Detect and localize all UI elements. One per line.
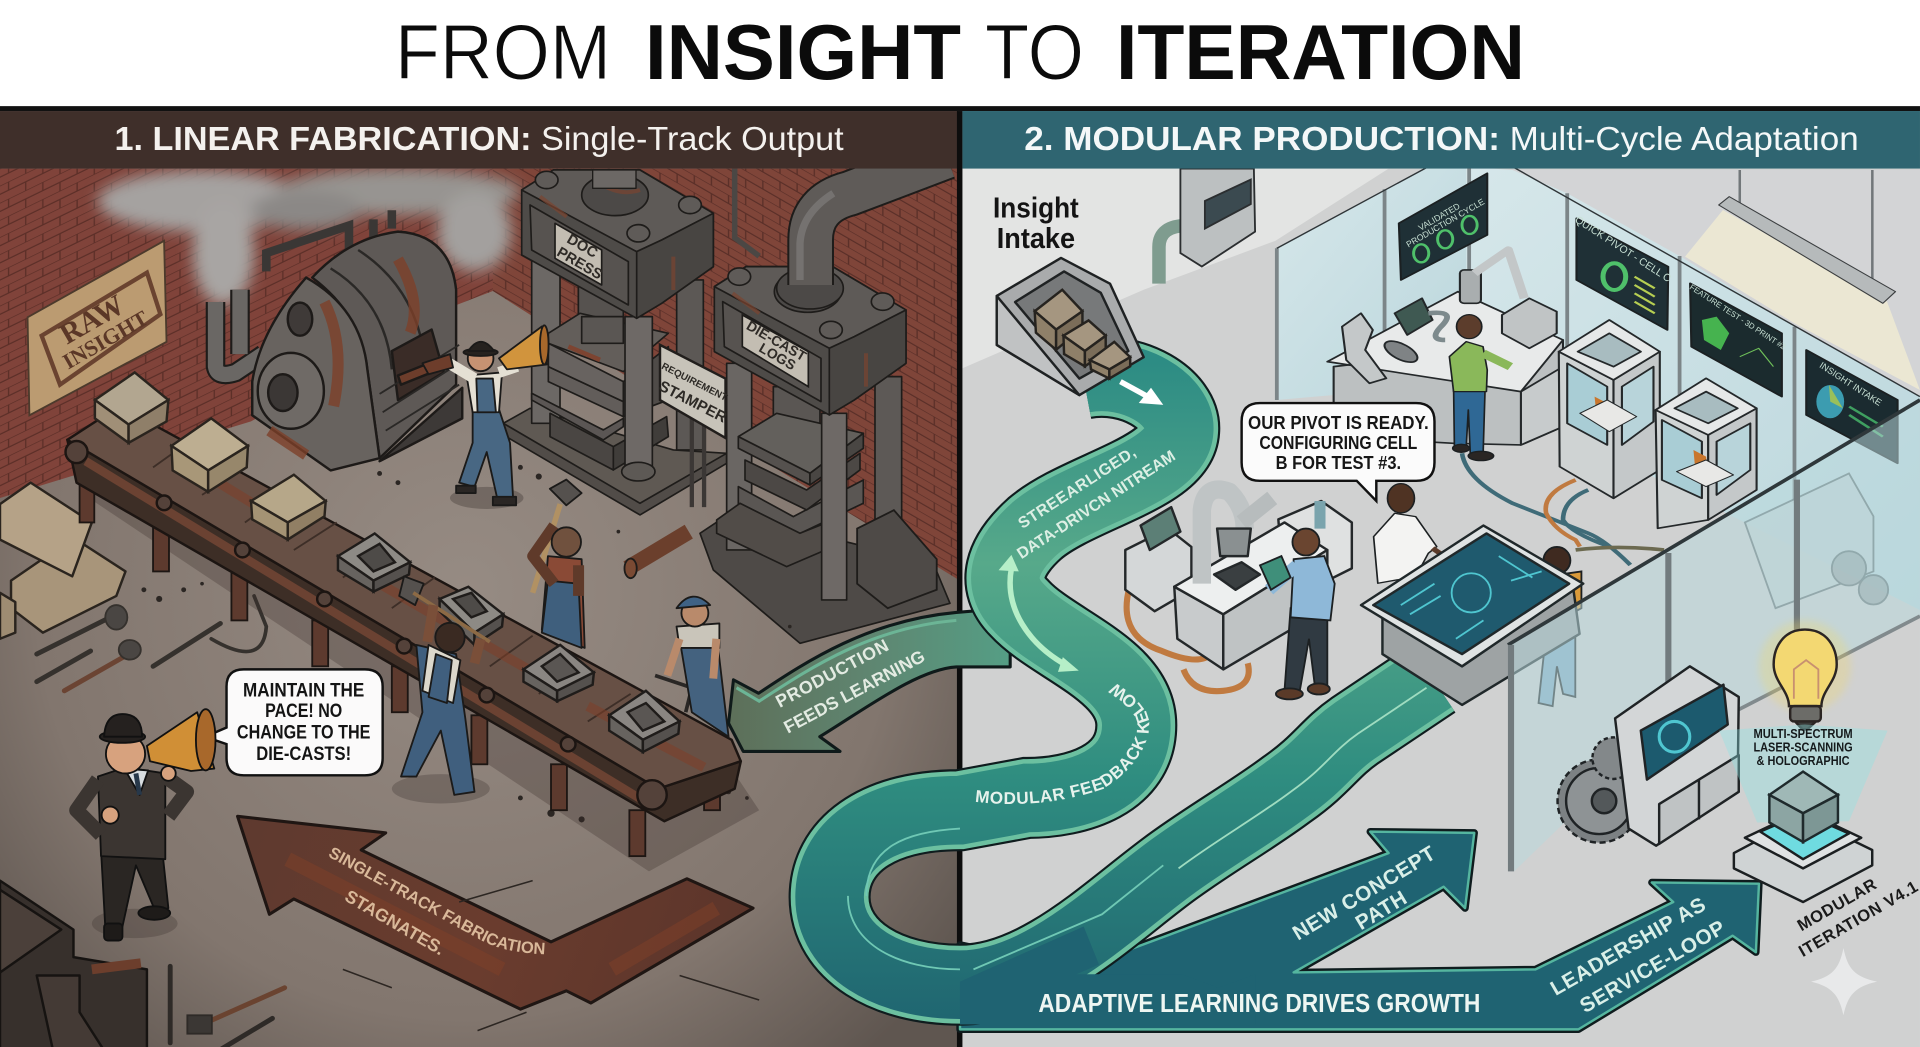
hologram label [1753,726,1853,768]
cubicle frames [1277,167,1920,503]
conveyor shadow [80,483,759,871]
gears [1558,737,1641,843]
conveyor belt [66,406,741,821]
speech bubble: maintain the pace: DIE-CASTS! [256,744,351,765]
label: modular iteration v4.1: MODULAR [1794,874,1880,935]
monitor: quick pivot cell c [1576,218,1668,330]
glass cubicle: side wall [1277,167,1468,400]
hologram label: LASER-SCANNING [1753,739,1853,754]
raw blocks on belt [95,372,326,540]
road label: streamlined data-driven stream: STREEARLIGED, [1015,444,1140,532]
heading: insight intake [994,196,1078,248]
scattered hand tools [170,966,285,1047]
worker pushing cart [655,597,729,737]
sign: requirement stamper: REQUIREMENT [659,361,729,404]
engineer in white shirt [1374,484,1447,583]
die-cast label plate: DIE-CAST [744,317,809,364]
sign: requirement stamper: STAMPER [656,378,729,426]
chute [997,258,1144,395]
speech bubble: maintain the pace: MAINTAIN THE [243,680,364,701]
monitor captions: VALIDATED [1417,201,1462,233]
arrow: single-track fabrication stagnates: SINGLE-TRACK FABRICATION [329,848,545,954]
worker in orange shirt [1514,547,1581,706]
overhead pipe [777,157,947,309]
sign: raw insight [28,241,167,415]
rear machine with gears [1745,473,1888,608]
clean floor [960,169,1920,1047]
wall kiosk and pipe [1159,169,1255,284]
back wall [960,169,1389,369]
title: INSIGHT [645,8,961,96]
raw cubes in the chute [1035,290,1130,379]
press: doc press: DOC [564,231,600,262]
3D printer 1 [1559,320,1660,498]
panel divider [957,111,962,1047]
vise and workbench [0,881,147,1047]
road label: streamlined data-driven stream: DATA-DRIVCN NITREAM [1014,448,1179,563]
ceiling zone [1513,170,1920,397]
road arrows [999,382,1163,672]
light cone [1685,210,1920,390]
arrow: single-track fabrication stagnates [236,814,760,1032]
speech bubble: our pivot is ready [1242,403,1434,501]
heading: insight intake: Intake [997,223,1075,255]
heading: insight intake: Insight [993,193,1079,225]
manager in suit with megaphone [77,709,216,941]
debris [141,465,792,822]
panel: modular production [960,167,1920,1047]
die-cast label plate: LOGS [756,339,799,373]
worker with sledgehammer [533,480,585,648]
furnace machine [252,232,462,470]
die-cast label plate [742,315,809,387]
speech bubble: maintain the pace [205,669,383,775]
monitor captions [1404,196,1884,408]
speech bubble: our pivot is ready: OUR PIVOT IS READY. [1248,412,1429,433]
arrow: production feeds learning [729,584,1010,751]
front glass partition [1508,400,1920,871]
conveyor legs [80,477,720,856]
panel heading: linear fabrication: 1. LINEAR FABRICATION: Single-Track Output [114,121,844,158]
sign: raw insight: INSIGHT [58,305,153,374]
engineer with tablet [1260,529,1335,699]
factory floor [0,169,960,1047]
hologram label: & HOLOGRAPHIC [1757,753,1850,768]
scanned cube [1769,772,1838,842]
press: die-cast logs [700,267,950,643]
glass cubicle: back wall [1466,167,1920,610]
wall conduit [735,169,759,256]
interactive table [1361,526,1583,705]
right brick wall [493,169,960,581]
arrow label: leadership as service-loop: LEADERSHIP AS [1547,893,1710,1000]
worker with megaphone [422,325,549,509]
floor tools [37,596,266,691]
sign: requirement stamper [656,345,729,507]
worker striking mould [392,576,490,803]
panel heading: linear fabrication [0,111,960,169]
pedestal [1734,810,1872,902]
road junction cover [960,927,1255,1024]
road label: modular feedback: MODULAR FEEDBACK KELOW [976,684,1150,804]
title: ITERATION [1116,8,1525,96]
stone pile [0,483,126,639]
speech bubble: maintain the pace: PACE! NO [265,701,342,722]
motor box and scrap [624,510,937,608]
arrow label: new concept path: PATH [1352,886,1411,935]
cables [1462,453,1664,565]
monitor: validated production cycle [1399,173,1487,280]
monitor: feature test [1690,283,1782,397]
cubicle room (authored in crop space) [1277,167,1920,610]
monitor captions: INSIGHT INTAKE [1818,360,1884,408]
exhaust pipes [216,210,392,374]
3D printer 2 [1656,378,1757,528]
modular feedback road [830,377,1433,985]
title: FROM [395,8,611,96]
lower arrows: new concept path and leadership loop [960,832,1759,1029]
left brick wall [0,169,508,498]
sign: raw insight: RAW [55,289,130,351]
panel heading: modular production: 2. MODULAR PRODUCTION: Multi-Cycle Adaptation [1024,121,1859,158]
monitor captions: FEATURE TEST - 3D PRINT #2 [1688,283,1788,352]
worker in green shirt [1449,315,1510,461]
icon: light bulb [1759,620,1851,729]
monitor captions: QUICK PIVOT - CELL C [1573,215,1673,285]
label: modular iteration v4.1: ITERATION V4.1 [1795,877,1920,961]
smoke clouds [98,169,520,305]
control kiosk [1615,666,1739,846]
press: doc press: PRESS [554,244,605,283]
hologram label: MULTI-SPECTRUM [1753,726,1853,741]
title: TO [985,8,1084,96]
panel: linear fabrication [0,111,957,1047]
speech bubble: maintain the pace: CHANGE TO THE [237,723,370,744]
back workstation [1327,250,1563,445]
moulded castings on belt [338,533,680,752]
arrow: production feeds learning: PRODUCTION [772,635,892,712]
title [395,8,1525,96]
speech bubble: our pivot is ready: B FOR TEST #3. [1276,452,1401,473]
road label: adaptive learning drives growth: ADAPTIVE LEARNING DRIVES GROWTH [1038,988,1480,1018]
workstation: left robot cell [1125,490,1352,691]
arrow label: leadership as service-loop: SERVICE-LOOP [1576,916,1730,1018]
arrow: production feeds learning: FEEDS LEARNING [780,646,928,737]
arrow label: new concept path: NEW CONCEPT [1289,842,1440,945]
monitor captions: PRODUCTION CYCLE [1404,196,1486,249]
press: doc press [503,170,727,515]
arrow: single-track fabrication stagnates: STAGNATES. [341,886,448,959]
hologram cone [1719,724,1888,822]
panel heading: modular production [962,111,1920,169]
sparkle mark [1811,948,1877,1015]
speech bubble: our pivot is ready: CONFIGURING CELL [1259,432,1417,453]
monitor: insight intake [1806,350,1898,463]
ceiling light [1719,170,1895,303]
